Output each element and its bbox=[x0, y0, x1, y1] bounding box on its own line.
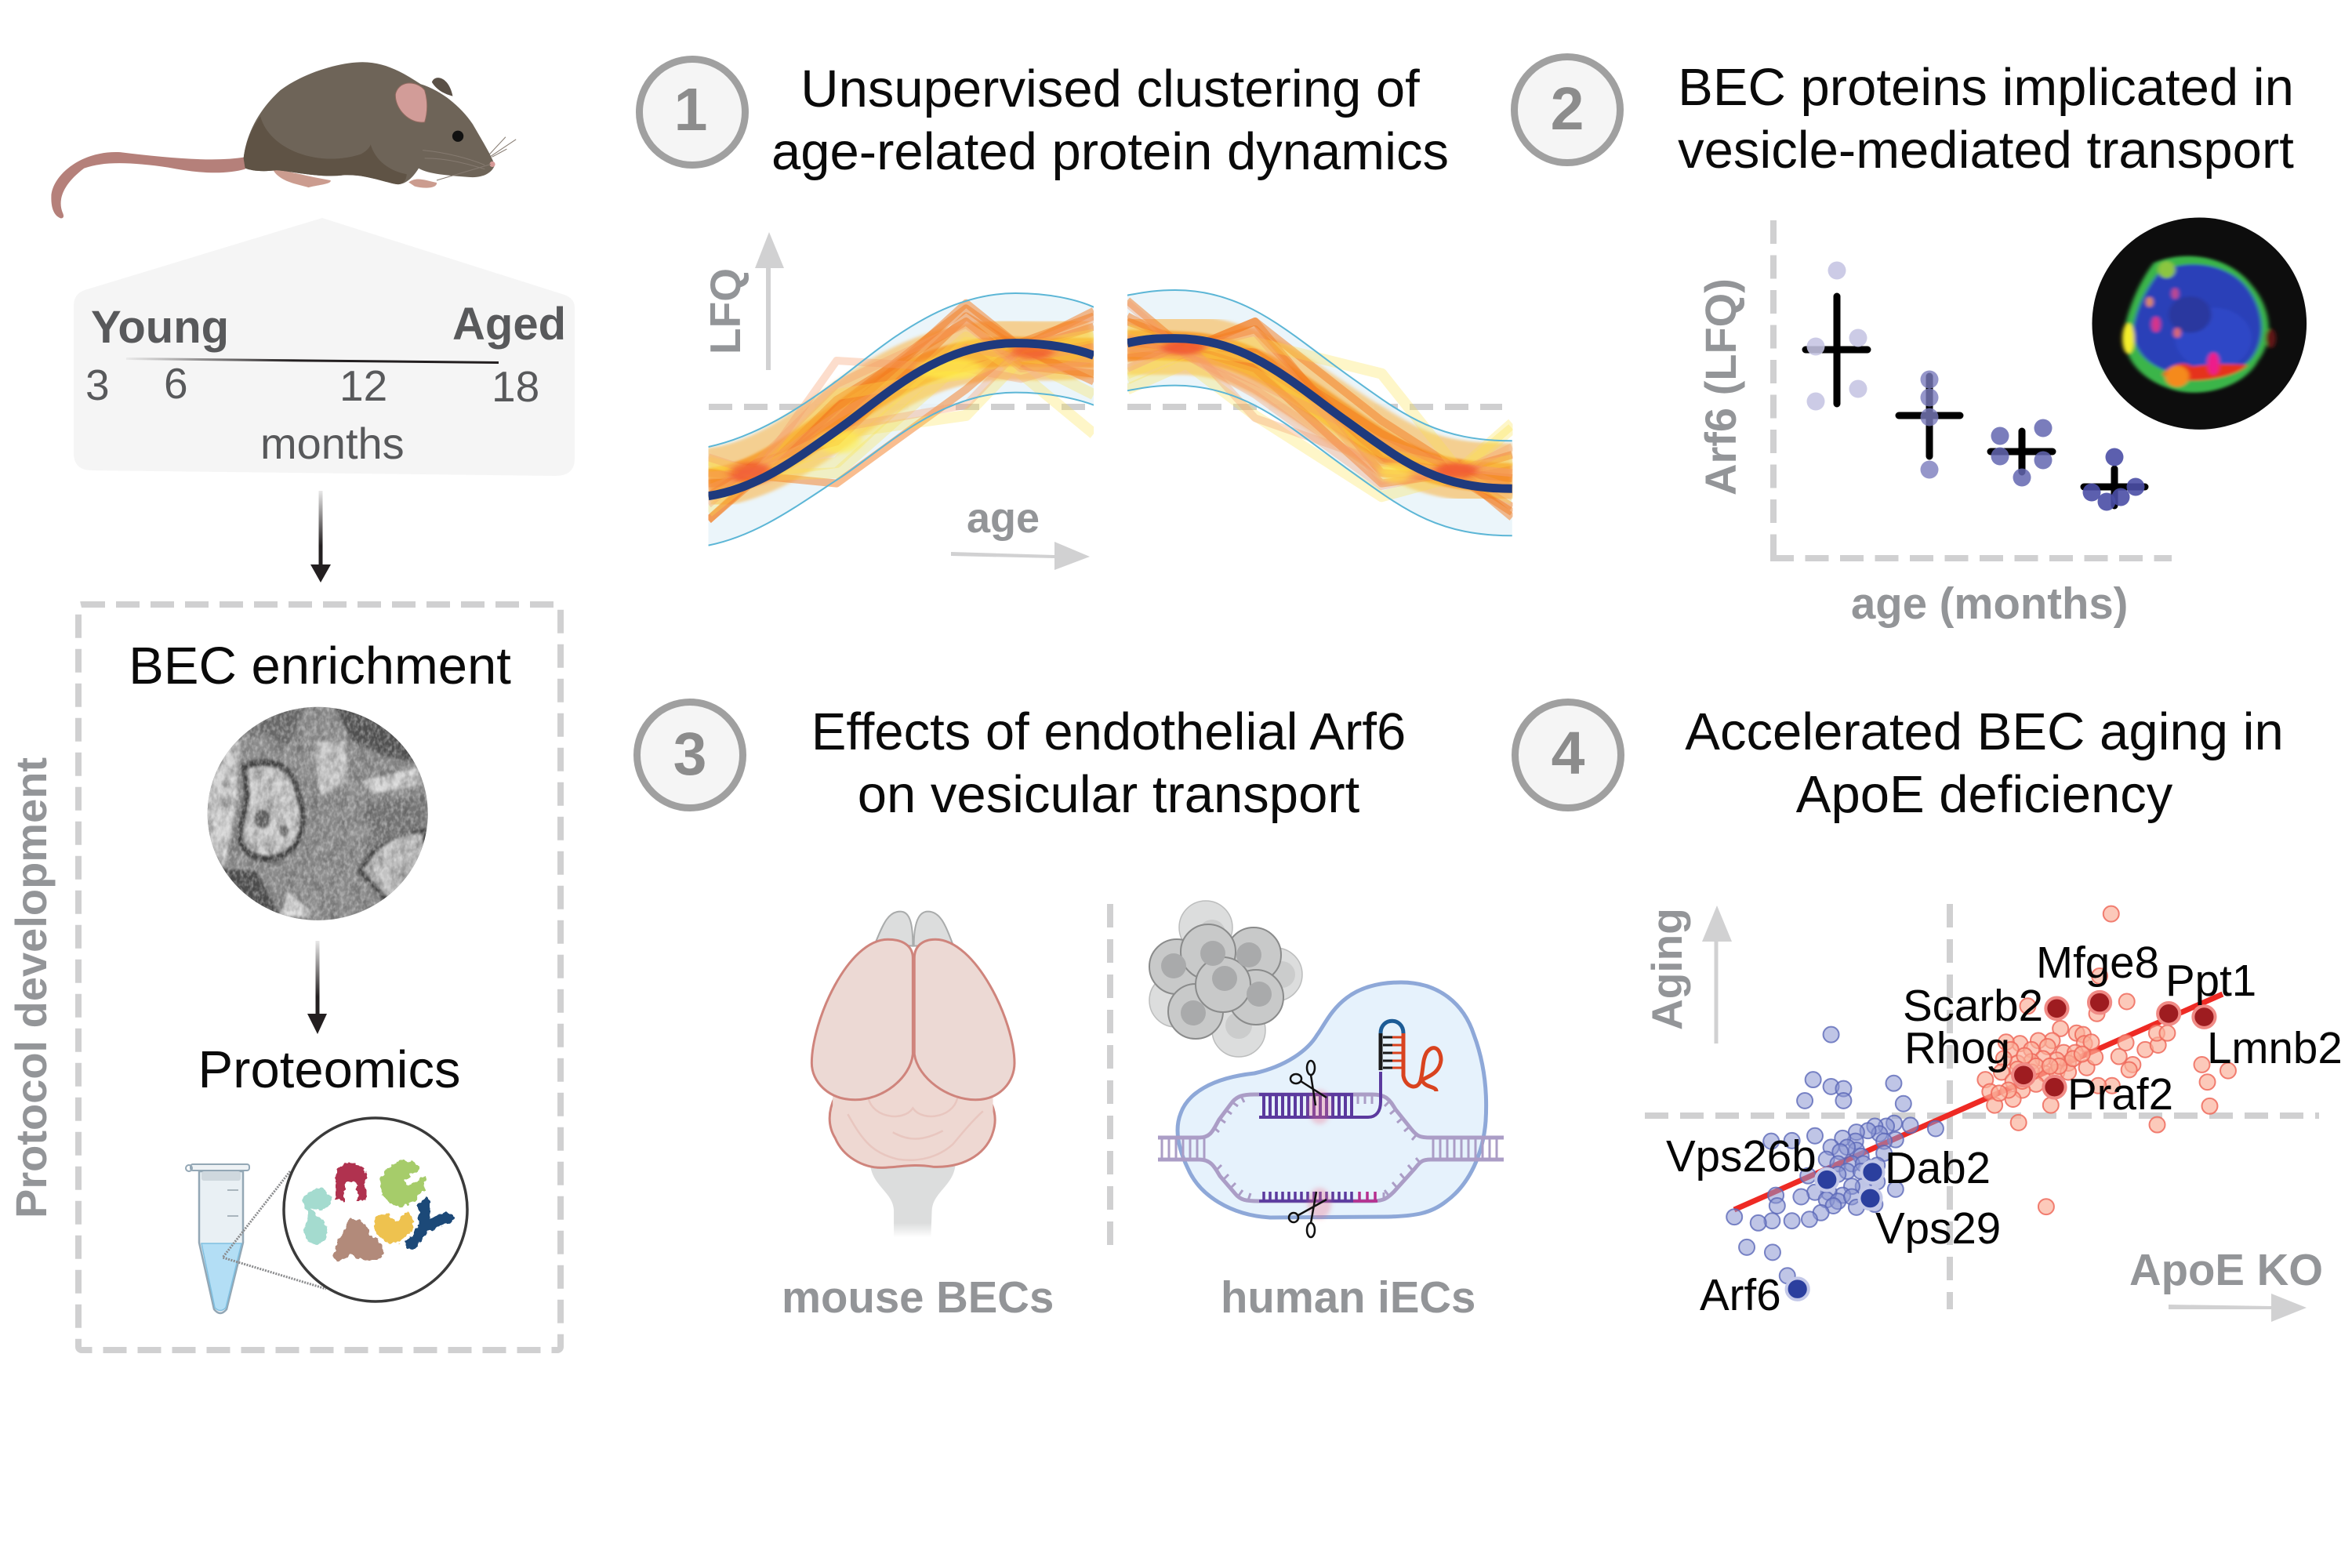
protein: green bbox=[380, 1160, 425, 1206]
heading 1: Unsupervised clustering of bbox=[800, 60, 1420, 118]
protein labels: Arf6 bbox=[1700, 1270, 1781, 1319]
group: 18 months bbox=[2082, 448, 2145, 511]
arrow: LFQ axis bbox=[755, 232, 784, 370]
axis label ApoE KO: ApoE KO bbox=[2129, 1245, 2323, 1294]
protein labels: Dab2 bbox=[1885, 1143, 1991, 1192]
axis label LFQ: LFQ bbox=[701, 268, 750, 354]
number badge 2 bbox=[1515, 56, 1620, 163]
heading: BEC enrichment: BEC enrichment bbox=[129, 637, 511, 695]
panel: age groups bbox=[74, 218, 575, 476]
number badge 3 bbox=[637, 702, 743, 808]
number badge 3: 3 bbox=[673, 720, 706, 788]
icon: iPSC colony bbox=[1149, 901, 1302, 1057]
bottom target strand bbox=[1259, 1192, 1353, 1201]
mouse back foot bbox=[274, 170, 331, 187]
heading 4: ApoE deficiency bbox=[1796, 765, 2173, 824]
protein labels: Ppt1 bbox=[2165, 956, 2256, 1005]
protein labels: Praf2 bbox=[2067, 1069, 2173, 1119]
protein: navy bbox=[412, 1203, 448, 1244]
image: immunofluorescence cell bbox=[2092, 218, 2307, 430]
sgRNA rungs bbox=[1383, 1037, 1392, 1068]
side label: protocol development: Protocol development bbox=[6, 757, 56, 1218]
DNA rungs bbox=[1162, 1094, 1497, 1201]
sgRNA stem left bbox=[1378, 1033, 1383, 1070]
heading 3: Effects of endothelial Arf6 bbox=[811, 702, 1406, 761]
arrow: to proteomics bbox=[307, 941, 327, 1034]
PAM bbox=[1353, 1192, 1377, 1201]
icon: CRISPR cell bbox=[1158, 982, 1504, 1237]
month 3: 3 bbox=[85, 361, 110, 409]
group: 3 months bbox=[1806, 262, 1867, 411]
cut glow bottom bbox=[1308, 1188, 1331, 1219]
heading 2: vesicle-mediated transport bbox=[1678, 121, 2294, 180]
protein labels: Vps29 bbox=[1875, 1203, 2001, 1253]
scissors top bbox=[1290, 1061, 1327, 1105]
y axis label: Arf6 (LFQ) bbox=[1696, 278, 1745, 495]
mouse tail bbox=[51, 152, 245, 218]
protein labels: Rhog bbox=[1904, 1023, 2010, 1073]
protein labels bbox=[1666, 938, 2343, 1319]
x axis label: age (months) bbox=[1851, 579, 2128, 628]
number badge 2: 2 bbox=[1551, 75, 1584, 143]
number badge 4: 4 bbox=[1552, 720, 1585, 787]
highlighted proteins bbox=[1787, 992, 2216, 1300]
protein labels: Vps26b bbox=[1666, 1131, 1817, 1181]
month 12: 12 bbox=[339, 361, 387, 410]
sgRNA loop bbox=[1381, 1021, 1403, 1033]
axis label age: age bbox=[967, 495, 1040, 542]
protein: crimson bbox=[336, 1163, 365, 1202]
panel background bbox=[74, 218, 575, 476]
mouse far ear bbox=[432, 78, 452, 96]
dot plot bbox=[1806, 262, 2145, 511]
cut glow top bbox=[1308, 1090, 1331, 1124]
panel: protocol development bbox=[78, 604, 561, 1350]
mouse belly shade bbox=[244, 116, 407, 184]
divider bbox=[1107, 904, 1113, 1245]
proteins circle bbox=[284, 1118, 467, 1301]
mouse nose bbox=[489, 162, 495, 167]
guide RNA duplex bbox=[1259, 1072, 1381, 1117]
heading: proteomics: Proteomics bbox=[198, 1040, 461, 1099]
panel 1: clustering bbox=[640, 60, 1512, 570]
heading 2: BEC proteins implicated in bbox=[1678, 58, 2294, 117]
icon: tube bbox=[186, 1164, 249, 1313]
months label: months bbox=[260, 419, 405, 468]
dashed box bbox=[78, 604, 561, 1350]
label: mouse BECs: mouse BECs bbox=[782, 1272, 1054, 1322]
image: electron micrograph bbox=[205, 703, 433, 924]
timeline bbox=[126, 358, 499, 364]
sgRNA tail bbox=[1403, 1033, 1441, 1091]
heading 4: Accelerated BEC aging in bbox=[1685, 702, 2284, 761]
panel 3: endothelial Arf6 bbox=[637, 702, 1504, 1322]
arrow: aging axis bbox=[1702, 906, 1732, 1044]
mouse eye bbox=[452, 131, 463, 142]
dashed midline bbox=[709, 404, 1502, 410]
month 6: 6 bbox=[164, 359, 188, 408]
scatter: up-regulated proteins bbox=[1977, 906, 2236, 1214]
label: young: Young bbox=[91, 302, 229, 353]
y axis label: Aging bbox=[1642, 908, 1691, 1030]
protein labels: Lmnb2 bbox=[2207, 1023, 2343, 1073]
month 18: 18 bbox=[492, 362, 539, 411]
heading 3: on vesicular transport bbox=[858, 765, 1360, 824]
protein: teal bbox=[303, 1189, 332, 1244]
mouse body bbox=[244, 62, 495, 184]
DNA strands bbox=[1158, 1094, 1504, 1201]
group: 12 months bbox=[1991, 419, 2053, 486]
panel 4: ApoE deficiency bbox=[1515, 702, 2343, 1322]
chart: falling cluster bbox=[1127, 290, 1512, 535]
label: human iECs: human iECs bbox=[1221, 1272, 1475, 1322]
protein labels: Scarb2 bbox=[1903, 981, 2043, 1030]
icon: mouse brain bbox=[811, 912, 1014, 1237]
icon: mouse bbox=[51, 62, 516, 218]
scissors bottom bbox=[1289, 1192, 1327, 1237]
label: aged: Aged bbox=[452, 299, 566, 350]
number badge 1: 1 bbox=[674, 76, 707, 143]
arrow: age axis bbox=[951, 542, 1090, 570]
number badge 1 bbox=[640, 60, 745, 165]
protein: brown bbox=[335, 1218, 383, 1261]
mouse whiskers bbox=[423, 137, 516, 180]
zoom lines bbox=[223, 1171, 326, 1289]
number badge 4 bbox=[1515, 702, 1621, 808]
panel 2: vesicle transport bbox=[1515, 56, 2307, 628]
chart: rising cluster bbox=[709, 293, 1094, 546]
arrow: ApoE KO axis bbox=[2169, 1294, 2307, 1322]
mouse front foot bbox=[408, 179, 437, 188]
protein: yellow bbox=[374, 1214, 413, 1243]
dashed axes bbox=[1770, 220, 2172, 561]
group: 6 months bbox=[1899, 370, 1960, 478]
protein labels: Mfge8 bbox=[2036, 938, 2159, 987]
scatter: down-regulated proteins bbox=[1726, 1027, 1944, 1283]
mouse near ear bbox=[395, 83, 427, 122]
dashed axes bbox=[1645, 904, 2319, 1309]
heading 1: age-related protein dynamics bbox=[771, 122, 1449, 181]
regression line bbox=[1734, 994, 2223, 1210]
arrow: to protocol bbox=[310, 491, 331, 583]
